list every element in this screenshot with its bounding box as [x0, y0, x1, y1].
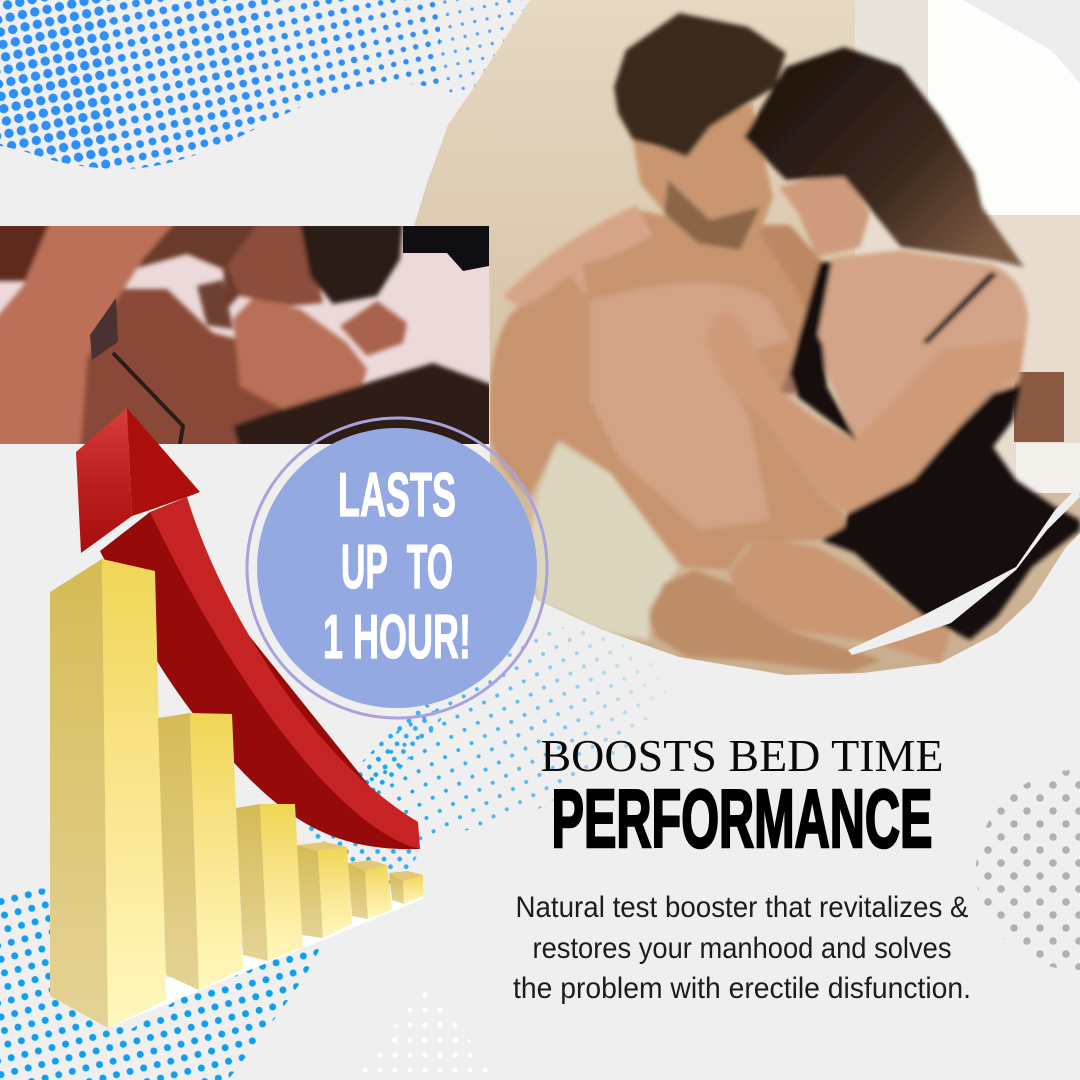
dot pattern: top left wave — [0, 0, 535, 175]
man hair — [300, 222, 403, 304]
man chest highlight — [590, 283, 790, 530]
body text: Natural test booster that revitalizes & — [516, 891, 968, 924]
man face — [633, 103, 773, 250]
woman hair — [744, 47, 1024, 267]
dot pattern: bottom left wave — [0, 888, 322, 1080]
woman face — [779, 170, 870, 257]
bar 2 — [158, 713, 243, 990]
bar 4 — [297, 842, 352, 938]
man face — [227, 225, 323, 306]
body text: the problem with erectile disfunction. — [513, 972, 971, 1005]
bar 3 — [236, 804, 303, 961]
body text: restores your manhood and solves — [532, 932, 952, 965]
man chest — [133, 222, 305, 309]
bar 6 — [389, 871, 423, 904]
badge: lasts up to 1 hour: UP TO — [341, 533, 453, 602]
woman dress lower — [821, 385, 1080, 640]
shadow behind arm — [779, 352, 800, 397]
brush stroke — [848, 487, 1080, 655]
man forearm — [197, 280, 233, 329]
pillow — [530, 443, 679, 640]
dot pattern: centre pale wave — [300, 625, 680, 890]
man legs — [649, 570, 882, 673]
body text — [513, 891, 971, 1005]
photo: couple on bed — [410, 0, 1080, 680]
man hair — [614, 13, 786, 157]
woman dress strap — [922, 272, 998, 344]
man arm — [0, 222, 175, 450]
dot pattern: right grey circle — [976, 770, 1080, 970]
woman face — [233, 298, 367, 409]
man crossed leg — [729, 537, 951, 663]
badge: lasts up to 1 hour — [247, 418, 547, 718]
woman hand — [340, 301, 407, 356]
heading: boosts bed time: BOOSTS BED TIME — [540, 730, 944, 781]
bikini strap — [113, 353, 183, 444]
man beard — [664, 180, 760, 250]
woman far shoulder — [740, 225, 830, 340]
dark wall — [403, 226, 489, 271]
badge: lasts up to 1 hour: LASTS — [338, 461, 456, 530]
woman dress top — [790, 262, 858, 442]
badge: lasts up to 1 hour: 1 HOUR! — [323, 603, 471, 672]
woman hair — [233, 363, 495, 450]
woman chest and shoulder — [813, 250, 1028, 450]
woman torso — [80, 289, 300, 450]
bar 5 — [348, 860, 392, 919]
woman arm around shoulder — [503, 205, 652, 307]
photo: couple embrace — [0, 222, 495, 450]
woman arm — [706, 314, 1024, 513]
left shadow band — [0, 222, 55, 281]
arrow — [76, 408, 420, 849]
man torso — [489, 210, 844, 570]
bar 1 — [50, 559, 166, 1028]
dot pattern: bottom white triangle — [352, 988, 502, 1078]
chart: rising bars and arrow — [50, 408, 423, 1028]
bikini top — [90, 298, 118, 360]
base — [108, 880, 423, 1028]
